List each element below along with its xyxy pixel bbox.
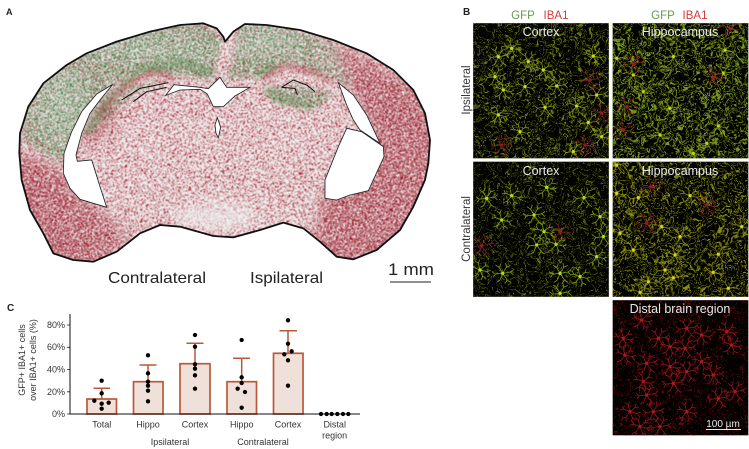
y axis ticks and labels: 20%: [47, 387, 65, 397]
data points: [92, 318, 350, 416]
column header left: [511, 10, 568, 22]
y axis ticks and labels: 0%: [52, 409, 65, 419]
column header left: IBA1: [544, 10, 568, 22]
right ventricle lower: [325, 128, 384, 200]
title: Distal brain region: Distal brain region: [630, 302, 730, 316]
row label Ipsilateral: Ipsilateral: [461, 65, 473, 115]
hippocampal fissure lines: [122, 80, 315, 102]
group label Ipsilateral: Ipsilateral: [151, 437, 189, 447]
central ventricle: [166, 77, 250, 107]
y axis title: [17, 319, 38, 401]
brain section with cell dots: [18, 22, 431, 263]
label: Contralateral: Contralateral: [108, 270, 206, 287]
micrograph: ipsilateral cortex: [473, 23, 612, 162]
bars: [87, 353, 303, 414]
micrograph: ipsilateral hippocampus: [612, 23, 748, 158]
panel B: micrographs: [461, 7, 749, 437]
x axis labels: Cortex: [275, 420, 302, 430]
x axis labels: Hippo: [136, 420, 160, 430]
panel letter C: C: [7, 303, 14, 314]
column header right: [651, 10, 707, 22]
panel letter B: B: [463, 7, 470, 18]
x axis labels: Cortex: [182, 420, 209, 430]
x axis labels: [92, 420, 347, 440]
axes: [70, 314, 360, 414]
y axis ticks and labels: [47, 320, 70, 419]
column header right: IBA1: [683, 10, 707, 22]
panel A: brain section map: [6, 8, 433, 286]
y axis title: GFP+ IBA1+ cells: [17, 324, 27, 396]
panel letter A: A: [6, 7, 13, 17]
group label Contralateral: Contralateral: [237, 437, 289, 447]
row label Contralateral: Contralateral: [461, 196, 473, 262]
scale bar 1 mm: 1 mm: [388, 260, 434, 279]
left ventricle: [63, 84, 113, 207]
micrograph: contralateral hippocampus: [612, 162, 748, 297]
brain outline: [19, 23, 430, 262]
y axis title: over IBA1+ cells (%): [28, 319, 38, 401]
column header left: GFP: [511, 10, 535, 22]
micrograph: contralateral cortex: [473, 162, 609, 297]
title: Cortex: Cortex: [523, 25, 560, 39]
scale bar 100 µm: 100 µm: [706, 419, 740, 430]
aqueduct: [215, 118, 221, 138]
micrograph: distal brain region: [612, 300, 748, 437]
right ventricle upper: [338, 83, 380, 143]
x axis labels: Total: [92, 420, 111, 430]
column header right: GFP: [651, 10, 675, 22]
x axis labels: region: [322, 430, 347, 440]
title: Hippocampus contralateral: Hippocampus: [642, 164, 718, 178]
label: Ispilateral: Ispilateral: [250, 270, 323, 287]
title: Hippocampus: Hippocampus: [642, 25, 718, 39]
y axis ticks and labels: 60%: [47, 342, 65, 352]
x axis labels: Hippo: [230, 420, 253, 430]
title: Cortex contralateral: Cortex: [523, 164, 560, 178]
y axis ticks and labels: 80%: [47, 320, 65, 330]
x axis labels: Distal: [323, 420, 346, 430]
error bars: [94, 331, 297, 399]
panel C: bar chart: [7, 303, 360, 447]
y axis ticks and labels: 40%: [47, 364, 65, 374]
